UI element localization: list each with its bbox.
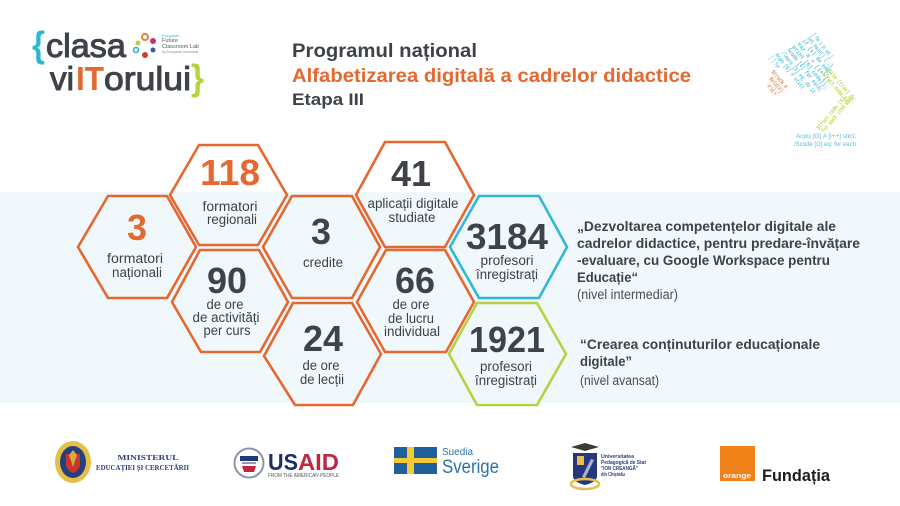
- hexagon: aplicații digitale: studiate: [388, 210, 436, 225]
- decorative code arrow: if (x) do end;: [800, 38, 833, 77]
- title: [292, 40, 691, 109]
- logo: Universitatea Pedagogică de Stat Ion Creangă: [571, 443, 646, 489]
- hexagon: formatori regionali: 118: [200, 152, 260, 193]
- logo: Suedia Sverige: Sverige: [442, 457, 499, 478]
- decorative code arrow: Struck #: [769, 69, 789, 90]
- logo: Universitatea Pedagogică de Stat Ion Creangă: "ION CREANGĂ": [601, 465, 638, 472]
- text block: course advanced: (nivel avansat): [580, 373, 659, 388]
- logo: Future Classroom Lab: Future: [162, 38, 178, 44]
- logo: USAID: US: [268, 449, 298, 475]
- decorative code arrow: Acpu [G] # [i++] stict;: [796, 134, 856, 140]
- logo: Ministerul Educației și Cercetării: MINISTERUL: [118, 453, 178, 462]
- text block: course advanced: [580, 337, 820, 388]
- decorative code arrow: var a = [i++];: [795, 41, 832, 85]
- decorative code arrow: while (true) do;: [824, 66, 858, 104]
- logo: clasa viITorului: IT: [76, 60, 104, 97]
- hexagon: formatori naționali: [78, 196, 196, 298]
- text block: course advanced: “Crearea conținuturilor educaționale: [580, 337, 820, 352]
- decorative code arrow: /Scode [G] eq: for each: [794, 142, 856, 148]
- logo: Suedia Sverige: Suedia: [442, 446, 473, 458]
- hexagon: ore de activități: de ore: [206, 297, 244, 312]
- hexagon: profesori înregistrați 1921: [449, 303, 566, 405]
- hexagon: ore de lecții: de lecții: [300, 372, 344, 387]
- hexagon: profesori înregistrați 1921: profesori: [480, 359, 532, 374]
- decorative code arrow: [765, 32, 858, 148]
- hexagon: ore de lucru individual: [357, 250, 474, 352]
- logo: Future Classroom Lab: [134, 33, 199, 58]
- title: Programul național: [292, 40, 477, 62]
- decorative code arrow: Struct.code [#];: [815, 93, 849, 131]
- hexagon: formatori naționali: formatori: [107, 251, 163, 266]
- decorative code arrow: print [G] code();: [790, 44, 829, 91]
- logo: clasa viITorului: orului: [104, 60, 191, 97]
- hexagon: aplicații digitale: 41: [391, 153, 431, 194]
- hexagon: ore de lucru individual: de lucru: [388, 311, 434, 326]
- logo: clasa viITorului: vi: [50, 60, 74, 97]
- hexagon: profesori înregistrați 3184: 3184: [466, 216, 548, 257]
- logo: clasa viITorului: clasa: [46, 27, 127, 64]
- hexagon: formatori naționali: 3: [127, 207, 147, 248]
- decorative code arrow: [ for i in set ]: [810, 32, 834, 60]
- hexagon: ore de lucru individual: individual: [384, 324, 440, 339]
- decorative code arrow: orig.s: [765, 83, 779, 97]
- hexagon: profesori înregistrați 3184: [450, 196, 567, 298]
- text block: course intermediate: „Dezvoltarea competențelor digitale ale: [577, 219, 836, 234]
- decorative code arrow: int main() {;;}: [805, 35, 834, 69]
- text block: course advanced: digitale”: [580, 354, 632, 369]
- text block: course intermediate: Educație“: [577, 270, 638, 285]
- logo: clasa viITorului: [32, 24, 204, 98]
- hexagon: ore de activități: 90: [207, 260, 247, 301]
- hexagon: profesori înregistrați 1921: 1921: [469, 319, 545, 360]
- hexagon: formatori regionali: [170, 145, 287, 245]
- logo: USAID: [234, 448, 339, 479]
- decorative code arrow: [ ] for: [767, 55, 782, 70]
- title: Alfabetizarea digitală a cadrelor didactice: [292, 65, 691, 87]
- text block: course intermediate: [577, 219, 860, 302]
- hexagon: ore de activități: per curs: [204, 323, 251, 338]
- hexagon: ore de lecții: 24: [303, 318, 343, 359]
- hexagon: profesori înregistrați 1921: înregistrați: [474, 373, 537, 388]
- logo: Orange Fundația: Fundația: [762, 466, 831, 485]
- decorative code arrow: for each item end: [820, 96, 854, 134]
- text block: course intermediate: -evaluare, cu Google Workspace pentru: [577, 253, 830, 268]
- hexagon: aplicații digitale: [356, 142, 474, 247]
- hexagon: credite: credite: [303, 255, 343, 270]
- logo: USAID: AID: [298, 449, 339, 475]
- logo: clasa viITorului: }: [191, 57, 204, 98]
- hexagon: ore de activități: de activități: [192, 310, 260, 325]
- decorative code arrow: Struct.node {i}: [820, 71, 852, 106]
- hexagon: ore de activități: [172, 250, 288, 352]
- hexagon: ore de lucru individual: 66: [395, 260, 435, 301]
- logo: Suedia Sverige: [394, 446, 499, 478]
- hexagon: formatori regionali: formatori: [202, 199, 258, 214]
- hexagon: formatori regionali: regionali: [207, 212, 257, 227]
- logo: Future Classroom Lab: by European Schoolnet: [162, 50, 198, 54]
- decorative code arrow: Scode [G] for each;: [785, 47, 824, 94]
- text block: course intermediate: cadrelor didactice, pentru predare-învățare: [577, 236, 860, 251]
- logo: USAID: FROM THE AMERICAN PEOPLE: [268, 473, 339, 479]
- hexagon: aplicații digitale: aplicații digitale: [368, 196, 458, 211]
- hexagon: ore de lecții: de ore: [302, 358, 340, 373]
- hexagon: credite: [263, 196, 380, 298]
- logo: clasa viITorului: {: [32, 24, 45, 65]
- hexagon: ore de lucru individual: de ore: [392, 297, 430, 312]
- logo: Orange Fundația: [720, 446, 831, 485]
- background band: [0, 192, 900, 403]
- logo: Universitatea Pedagogică de Stat Ion Creangă: Universitatea: [601, 454, 634, 460]
- logo: Orange Fundația: orange: [723, 471, 751, 480]
- logo: Future Classroom Lab: European: [162, 33, 179, 38]
- decorative code arrow: Bold[#]: [767, 76, 784, 94]
- logo: Ministerul Educației și Cercetării: [55, 441, 189, 483]
- logo: Future Classroom Lab: Classroom Lab: [162, 44, 199, 50]
- logo: Universitatea Pedagogică de Stat Ion Creangă: Pedagogică de Stat: [601, 460, 646, 466]
- decorative code arrow: /learn [S] eq; do it: [779, 50, 817, 95]
- hexagon: profesori înregistrați 3184: înregistrați: [475, 267, 538, 282]
- logo: Universitatea Pedagogică de Stat Ion Creangă: din Chișinău: [601, 472, 625, 478]
- text block: course intermediate: (nivel intermediar): [577, 287, 678, 302]
- title: Etapa III: [292, 90, 364, 109]
- hexagon: formatori naționali: naționali: [112, 265, 162, 280]
- hexagon: credite: 3: [311, 211, 331, 252]
- decorative code arrow: Acpu [G] # stict: [773, 52, 806, 91]
- logo: Ministerul Educației și Cercetării: EDUCAȚIEI ȘI CERCETĂRII: [96, 462, 189, 473]
- hexagon: ore de lecții: [264, 303, 381, 405]
- hexagon: profesori înregistrați 3184: profesori: [480, 253, 534, 268]
